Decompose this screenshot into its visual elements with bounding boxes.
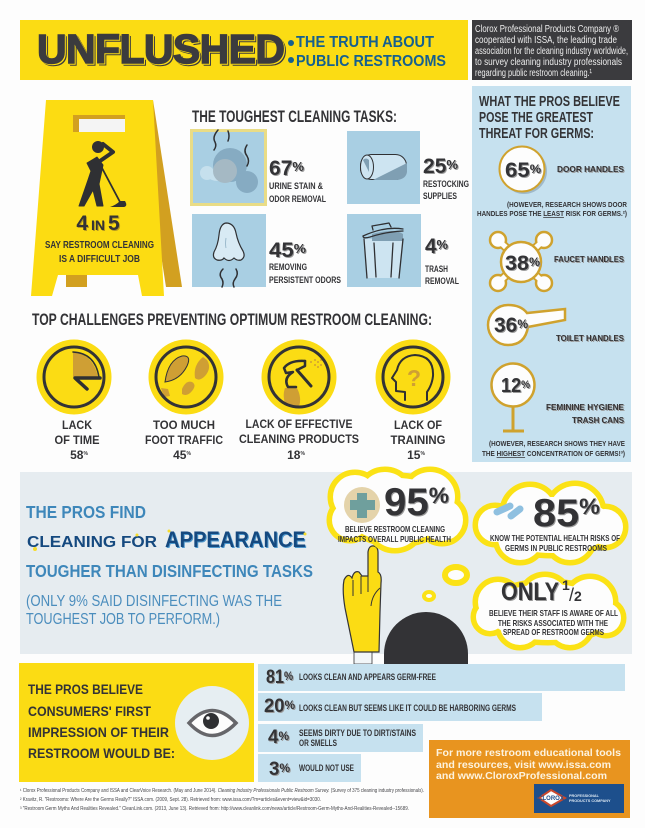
icon: toilet handle 36%: %	[517, 317, 528, 331]
challenge label	[239, 417, 359, 462]
resources text: and www.CloroxProfessional.com	[436, 770, 607, 782]
logo: Clorox: PROFESSIONAL	[569, 794, 600, 798]
icon: germ pills	[497, 506, 520, 516]
label: faucet handles: FAUCET HANDLES	[554, 254, 624, 264]
statement line 2	[27, 527, 306, 552]
label: door handles: DOOR HANDLES	[557, 164, 624, 174]
challenge label	[390, 418, 446, 462]
panel: more resources	[429, 740, 630, 818]
icon: faucet handle 38%: 38	[505, 252, 528, 275]
logo: Clorox: PRODUCTS COMPANY	[569, 799, 611, 803]
callout caption: BELIEVE RESTROOM CLEANING	[345, 524, 445, 534]
challenge: lack of training: ?	[407, 365, 421, 391]
icon: yellow glove pointing	[343, 546, 381, 664]
challenge label: %	[420, 451, 425, 457]
icon: faucet handle 38%: %	[529, 255, 540, 269]
challenge label: CLEANING PRODUCTS	[239, 432, 359, 446]
response bar: 3%: WOULD NOT USE	[299, 763, 354, 774]
panel: appearance vs disinfecting	[20, 472, 632, 654]
stat: only 1/2: ONLY	[501, 578, 559, 606]
header banner	[20, 20, 468, 80]
response bar: 81%: %	[284, 669, 293, 683]
task stat: 25%: 25	[423, 155, 446, 178]
challenge label: 45	[173, 448, 186, 462]
title colon	[288, 40, 294, 63]
panel heading	[479, 94, 620, 142]
challenge: effective cleaning products	[239, 340, 359, 462]
icon: trash can 12%: 12	[501, 375, 523, 397]
logo: Clorox	[534, 784, 624, 813]
challenge label: LACK	[62, 418, 92, 432]
challenge label: TOO MUCH	[153, 418, 215, 432]
sign caption: IS A DIFFICULT JOB	[59, 253, 140, 265]
sign caption: SAY RESTROOM CLEANING	[45, 239, 154, 251]
response bar: 4%: OR SMELLS	[299, 738, 337, 749]
task stat: 4%: 4	[425, 235, 437, 258]
panel: germ threats	[472, 86, 631, 462]
footnotes	[20, 788, 424, 812]
wet floor sign: 4 in 5	[31, 100, 182, 296]
panel heading: THREAT FOR GERMS:	[479, 126, 594, 142]
callout caption	[489, 608, 618, 637]
callout caption: GERMS IN PUBLIC RESTROOMS	[505, 543, 607, 553]
icon: toilet handle 36%	[488, 305, 565, 345]
statement line 1: THE PROS FIND	[26, 502, 146, 522]
task stat: 67%: 67	[269, 157, 292, 180]
task stat: 4%	[425, 235, 459, 286]
challenge: foot traffic	[145, 340, 224, 462]
callout caption: SPREAD OF RESTROOM GERMS	[503, 627, 604, 637]
response bar: 81%	[258, 664, 625, 691]
resources text: For more restroom educational tools	[436, 747, 621, 759]
label: toilet handles: TOILET HANDLES	[556, 333, 624, 343]
statement note	[26, 593, 282, 628]
challenge label	[145, 418, 223, 462]
task stat: 45%: REMOVING	[269, 262, 307, 272]
note: highest concentration	[482, 439, 625, 458]
icon: medical cross	[344, 487, 380, 523]
challenge label: %	[186, 451, 191, 457]
task tile: trash removal	[347, 214, 421, 287]
task stat: 67%: %	[292, 159, 304, 174]
callout caption	[338, 524, 451, 544]
stat: 95%: 95	[384, 481, 427, 524]
task stat: 4%: %	[437, 237, 448, 252]
response bar: 4%	[258, 724, 423, 752]
challenge: lack of training	[376, 340, 450, 462]
icon: head silhouette	[384, 612, 468, 664]
callout caption	[490, 533, 620, 553]
label: feminine hygiene trash cans: FEMININE HYGIENE	[546, 402, 624, 412]
response bar: 4%: 4	[268, 727, 279, 748]
response bar: 20%: 20	[264, 696, 285, 717]
stat: 85%: %	[579, 494, 600, 519]
task stat: 45%: 45	[269, 239, 292, 262]
sign caption	[45, 239, 154, 265]
callout caption: THE RISKS ASSOCIATED WITH THE	[498, 618, 608, 628]
stat: only 1/2: 1	[562, 577, 570, 593]
statement note: TOUGHEST JOB TO PERFORM.)	[26, 611, 220, 628]
statement line 2: APPEARANCE	[165, 527, 306, 552]
resources text: and resources, visit www.issa.com	[436, 759, 611, 771]
callout: 85%	[478, 486, 623, 560]
icon: trash can 12%: %	[521, 379, 530, 391]
challenge label: FOOT TRAFFIC	[145, 433, 223, 447]
first impression heading: THE PROS BELIEVE	[28, 682, 143, 697]
title: Unflushed: UNFLUSHED	[37, 26, 285, 72]
resources text	[436, 747, 621, 782]
response bar: 20%	[258, 693, 542, 721]
icon: person mopping	[79, 141, 126, 207]
response bar: 81%: LOOKS CLEAN AND APPEARS GERM-FREE	[299, 672, 436, 683]
response bar: 20%: %	[285, 698, 295, 712]
challenge label: TRAINING	[390, 433, 446, 447]
note: highest concentration: THE HIGHEST CONCENTRATION OF GERMS!³)	[482, 449, 625, 458]
panel heading: POSE THE GREATEST	[479, 110, 593, 126]
statement note: (ONLY 9% SAID DISINFECTING WAS THE	[26, 593, 282, 610]
task stat: 25%: %	[446, 157, 458, 172]
response bar: 4%: SEEMS DIRTY DUE TO DIRT/STAINS	[299, 728, 416, 739]
challenge label: %	[83, 451, 88, 457]
panel: first impression	[19, 663, 254, 782]
challenge label: 58	[70, 448, 83, 462]
task stat: 4%: REMOVAL	[425, 276, 459, 286]
task stat: 25%: SUPPLIES	[423, 191, 457, 201]
icon: door handle 65%: %	[530, 162, 541, 176]
task stat: 45%: %	[294, 241, 306, 256]
response bar: 3%: 3	[269, 759, 280, 780]
heading: top challenges: TOP CHALLENGES PREVENTING OPTIMUM RESTROOM CLEANING:	[32, 311, 432, 329]
challenge label: LACK OF	[394, 418, 442, 432]
icon: door handle 65%	[500, 146, 547, 194]
stat: only 1/2: 2	[574, 588, 582, 604]
intro text panel	[472, 20, 632, 80]
first impression heading: CONSUMERS' FIRST	[28, 704, 152, 719]
footnotes: ¹ Clorox Professional Products Company and ISSA and ClearVoice Research. (May and June 2014). Cleaning Industry Professionals Public Restroom Survey. (Survey of 375 cleaning industry professionals).	[20, 788, 424, 794]
note: door handles least risk	[477, 200, 627, 218]
task stat: 67%: URINE STAIN &	[269, 181, 323, 191]
icon: eye	[175, 686, 249, 760]
task stat: 25%	[423, 155, 469, 201]
note: door handles least risk: HANDLES POSE THE LEAST RISK FOR GERMS.²)	[477, 209, 627, 218]
task stat: 4%: TRASH	[425, 264, 448, 274]
label: feminine hygiene trash cans: TRASH CANS	[572, 415, 624, 425]
icon: toilet handle 36%: 36	[494, 314, 517, 337]
callout: only one half	[476, 577, 621, 645]
subtitle line 2: PUBLIC RESTROOMS	[296, 53, 446, 70]
first impression heading: RESTROOM WOULD BE:	[28, 746, 175, 761]
callout: 95%	[332, 472, 463, 548]
response bar: 81%: 81	[266, 667, 287, 688]
task tile: restocking supplies	[347, 131, 420, 204]
challenge label: %	[300, 451, 305, 457]
challenge label: 15	[407, 448, 420, 462]
challenge label: 18	[287, 448, 300, 462]
task tile: urine stain	[192, 130, 266, 204]
intro text panel: regarding public restroom cleaning.¹	[475, 68, 592, 79]
thought bubbles	[424, 567, 467, 600]
footnotes: ² Kravitz, R. "Restrooms: Where Are the Germs Really?" ISSA.com. (2009, Sept. 28). Retrieved from: www.issa.com/?m=articles&event=view&id=3030.	[20, 797, 321, 803]
label: feminine hygiene trash cans	[546, 402, 624, 425]
icon: faucet handle 38%	[490, 232, 552, 291]
task stat: 67%	[269, 157, 326, 204]
task stat: 67%: ODOR REMOVAL	[269, 194, 326, 204]
challenge: lack of time	[36, 340, 112, 462]
challenge label: LACK OF EFFECTIVE	[246, 417, 352, 431]
task tile: persistent odors	[192, 214, 266, 287]
sign handle	[73, 115, 125, 132]
heading: toughest cleaning tasks: THE TOUGHEST CLEANING TASKS:	[192, 107, 397, 126]
logo: Clorox: CLOROX	[538, 796, 564, 802]
callout caption: IMPACTS OVERALL PUBLIC HEALTH	[338, 534, 451, 544]
stat: 4 in 5: 4IN5	[76, 212, 120, 235]
task stat: 45%: PERSISTENT ODORS	[269, 275, 341, 285]
icon: door handle 65%: 65	[505, 159, 528, 182]
task stat: 25%: RESTOCKING	[423, 179, 469, 189]
challenge label: OF TIME	[54, 433, 100, 447]
stat: 85%: 85	[533, 492, 576, 535]
icon: trash can 12%	[492, 364, 534, 431]
response bar: 20%: LOOKS CLEAN BUT SEEMS LIKE IT COULD BE HARBORING GERMS	[299, 703, 516, 714]
statement line 2: CLEANING FOR	[27, 534, 157, 551]
footnotes: ³ "Restroom Germ Myths And Realities Revealed." CleanLink.com. (2013, June 13). Retrieved from: http://www.cleanlink.com/news/article/Restroom-Germ-Myths-And-Realities-Revealed--15689.	[20, 806, 409, 812]
statement line 3: TOUGHER THAN DISINFECTING TASKS	[26, 561, 313, 581]
stat: only 1/2: /	[569, 585, 574, 605]
first impression heading	[28, 682, 175, 761]
first impression heading: IMPRESSION OF THEIR	[28, 725, 169, 740]
response bar: 3%	[258, 754, 361, 782]
response bar: 3%: %	[279, 761, 290, 775]
task stat: 45%	[269, 239, 341, 285]
response bar: 4%: %	[278, 729, 289, 743]
stat: 95%: %	[429, 483, 449, 508]
challenge label	[54, 418, 100, 462]
subtitle line 1: THE TRUTH ABOUT	[296, 34, 434, 51]
